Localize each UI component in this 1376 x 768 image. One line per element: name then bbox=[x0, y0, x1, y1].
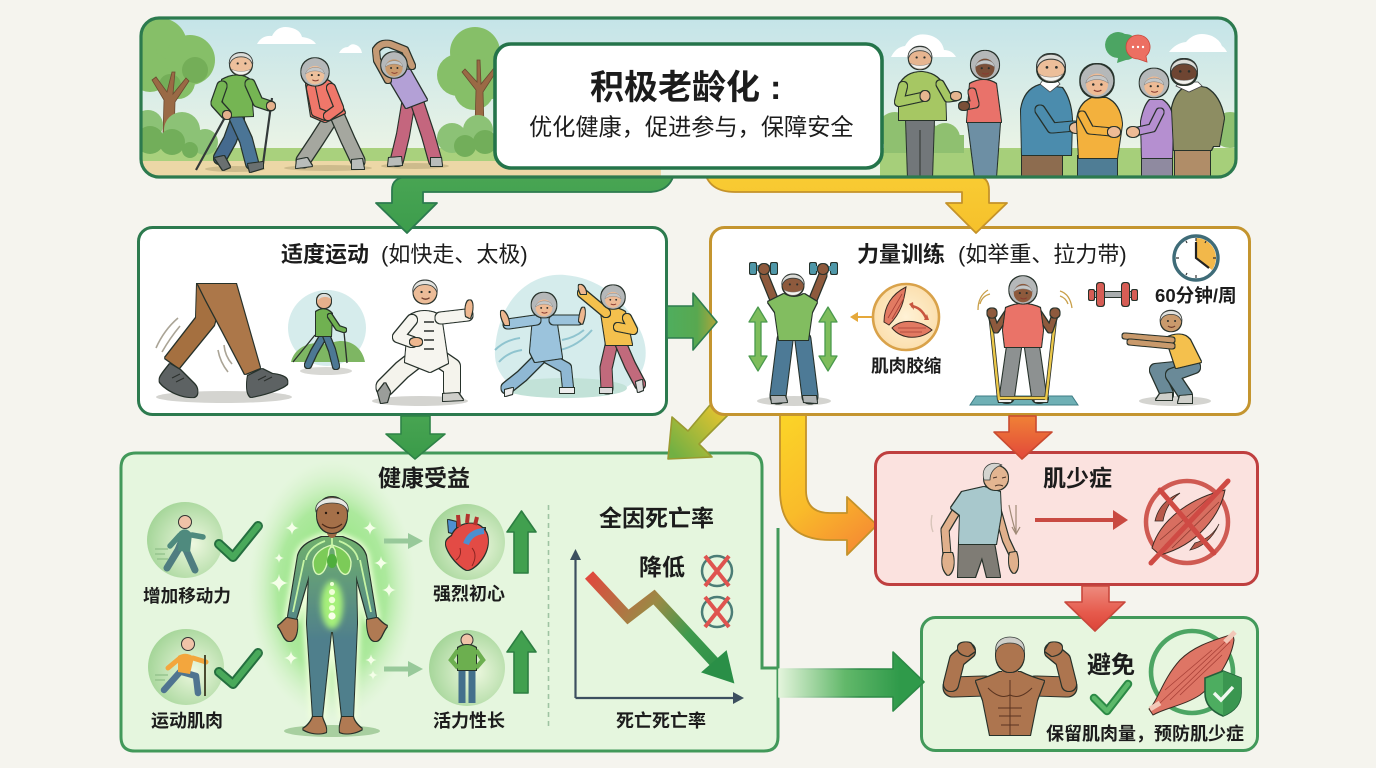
arrow: vitality up bbox=[507, 631, 536, 693]
icon: barbell bbox=[1089, 283, 1137, 306]
icon: clock bbox=[1174, 236, 1218, 280]
icon: muscle contraction bbox=[873, 284, 939, 350]
label: mobility: 增加移动力 bbox=[143, 586, 231, 606]
path shadows bbox=[205, 163, 449, 172]
label: exercise muscle: 运动肌肉 bbox=[151, 711, 223, 731]
panel: avoid sarcopenia bbox=[922, 618, 1258, 750]
icon: green check bbox=[1094, 684, 1128, 711]
heading: health benefits: 健康受益 bbox=[378, 465, 470, 491]
icon: small walker bbox=[288, 290, 366, 375]
icon: crossed circles bbox=[702, 556, 732, 627]
arrow: green top bbox=[376, 160, 675, 233]
icon: check mark bbox=[219, 526, 258, 557]
figure: stretching woman bbox=[296, 58, 364, 169]
arrow: moderate to benefits bbox=[386, 416, 445, 459]
label: reduce: 降低 bbox=[639, 554, 685, 580]
figure: speaking man bbox=[899, 47, 961, 178]
label: 60 minutes per week: 60分钟/周 bbox=[1155, 285, 1237, 306]
arrow: strength to sarcopenia bbox=[994, 416, 1052, 459]
icon: squat man bbox=[1125, 311, 1211, 406]
banner: park illustration bbox=[129, 18, 1248, 178]
label: heart: 强烈初心 bbox=[433, 583, 505, 604]
icon: frail man bbox=[931, 463, 1020, 577]
icon: muscular man bbox=[951, 637, 1069, 735]
arrow: yellow curved to sarcopenia bbox=[780, 412, 877, 555]
label: vitality: 活力性长 bbox=[433, 711, 505, 731]
icon: resistance band woman bbox=[970, 276, 1078, 405]
icon: vitality circle bbox=[429, 630, 505, 706]
icon: check mark bbox=[219, 653, 258, 684]
arrow: to heart bbox=[384, 533, 423, 549]
icon: dumbbell man bbox=[750, 263, 837, 406]
arrow: benefits to avoid bbox=[779, 652, 924, 711]
label: preserve muscle: 保留肌肉量，预防肌少症 bbox=[1046, 723, 1244, 744]
figure: olive sweater man bbox=[1171, 59, 1224, 177]
arrow: to muscle loss bbox=[1035, 510, 1128, 530]
arrow: yellow-green diagonal bbox=[668, 405, 730, 459]
figure: yellow sweater woman bbox=[1077, 64, 1122, 177]
icon: healthy muscle shield bbox=[1149, 631, 1241, 716]
figure: side bend woman bbox=[376, 44, 442, 166]
arrow: sarcopenia to avoid bbox=[1065, 586, 1125, 631]
panel: moderate exercise bbox=[138, 228, 666, 414]
icon: green double arrow left bbox=[749, 307, 767, 371]
icon: mobility circle bbox=[147, 502, 223, 578]
title box bbox=[495, 44, 882, 168]
label: muscle contraction: 肌肉胶缩 bbox=[871, 356, 941, 376]
heading: strength training: 力量训练 (如举重、拉力带) bbox=[857, 242, 1127, 267]
icon: walking legs bbox=[156, 284, 292, 403]
title: 积极老龄化 : bbox=[590, 69, 781, 107]
panel: sarcopenia bbox=[876, 452, 1258, 584]
arrow: muscle pointer bbox=[850, 312, 873, 322]
heading: avoid: 避免 bbox=[1087, 652, 1135, 679]
connector line bbox=[776, 528, 780, 668]
figure: listening woman bbox=[959, 51, 1001, 177]
arrow: to vitality bbox=[384, 661, 423, 677]
arrow: heart up bbox=[507, 511, 536, 573]
icon: no muscle bbox=[1146, 481, 1228, 563]
tree right of left scene bbox=[437, 27, 500, 157]
figure: glowing body bbox=[248, 460, 416, 737]
clouds bbox=[257, 27, 1227, 57]
icon: exercise muscle circle bbox=[148, 629, 224, 705]
figure: purple sweater woman bbox=[1127, 69, 1173, 177]
heading: all cause mortality: 全因死亡率 bbox=[599, 505, 714, 531]
divider bbox=[548, 505, 550, 728]
arrow: moderate to strength bbox=[667, 293, 717, 350]
arrow: yellow top bbox=[704, 160, 1007, 233]
icon: tai chi pair bbox=[495, 275, 646, 398]
chart: mortality decline bbox=[570, 549, 744, 704]
tree left bbox=[142, 20, 218, 158]
icon: heart circle bbox=[429, 504, 505, 580]
bushes right bbox=[877, 112, 1248, 153]
subtitle: 优化健康，促进参与，保障安全 bbox=[529, 114, 854, 140]
icon: speech bubbles bbox=[1105, 32, 1150, 63]
figure: blue sweater man bbox=[1021, 54, 1082, 177]
panel: strength bbox=[710, 228, 1250, 414]
heading: moderate exercise: 适度运动 (如快走、太极) bbox=[281, 242, 528, 267]
heading: sarcopenia: 肌少症 bbox=[1043, 465, 1112, 491]
panel: health benefits bbox=[121, 453, 778, 751]
label: mortality axis: 死亡死亡率 bbox=[616, 711, 706, 731]
icon: green double arrow right bbox=[819, 307, 837, 371]
figure: walker bbox=[196, 53, 275, 172]
icon: tai chi man bbox=[372, 280, 473, 406]
